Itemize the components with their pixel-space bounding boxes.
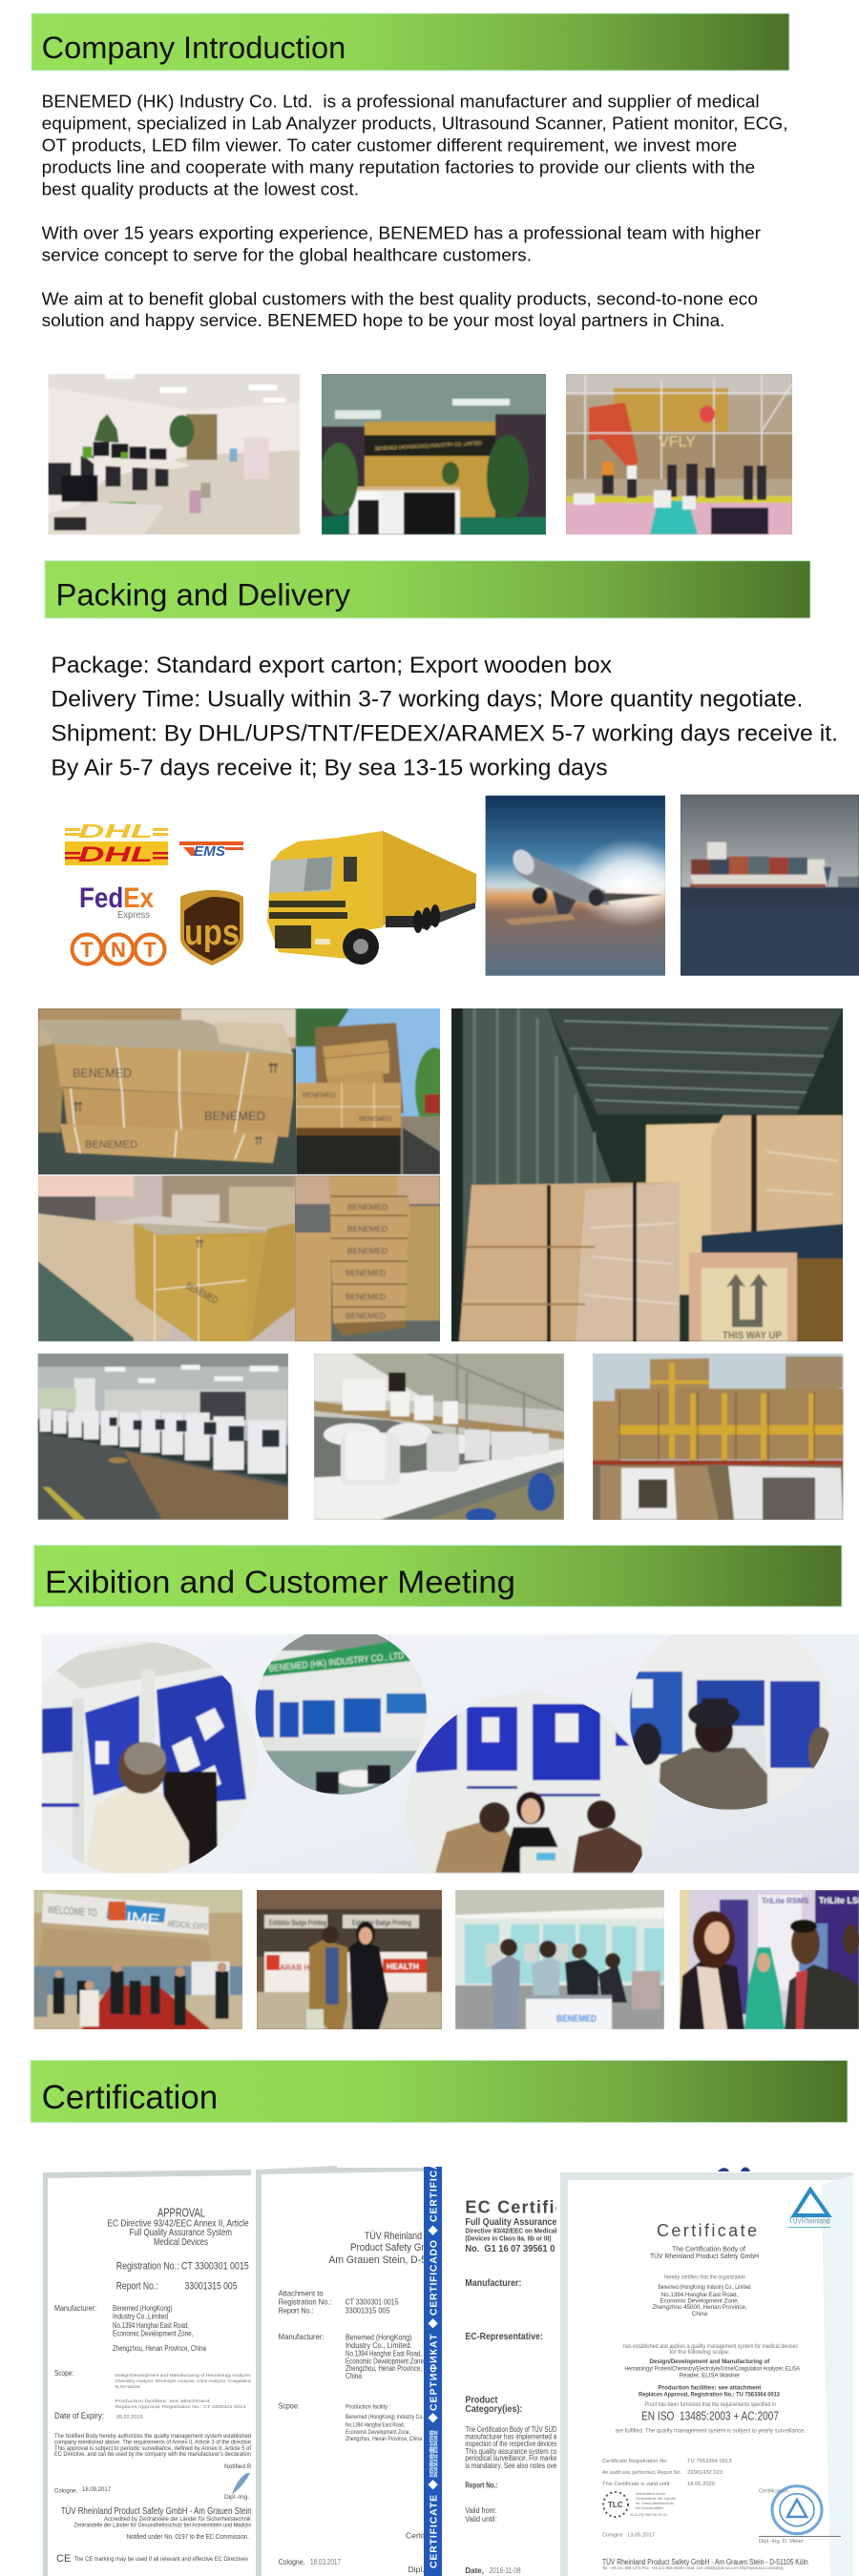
photo: customer and staff at Arab Health: Exhibitor Badge Printing [269,1919,326,1927]
heading: Packing and Delivery: Packing and Delivery [55,577,350,612]
text block: delivery terms: Delivery Time: Usually within 3-7 working days; More quantity negotiate. [51,687,803,713]
certificate seal strip: CERTIFICATE [428,2495,439,2568]
heading: Packing and Delivery [45,561,810,618]
image: yellow truck [267,831,476,965]
certificate: approval: 33001315 005 [185,2280,237,2292]
photo: FIME medical expo entrance: MEDICAL EXPO [167,1919,208,1932]
icon: TUV triangle [788,2190,830,2228]
certificate: EC certificate: Report No.: [465,2481,497,2490]
certificate: approval: The Notified Body hereby authorizes the quality management system established [54,2433,252,2440]
certificate: approval: Zhengzhou, Henan Province, China [113,2344,206,2353]
text block: company introduction: service concept to serve for the global healthcare customers. [42,244,532,264]
icon: accreditation mark [603,2491,677,2517]
certificate: ISO 13485: TÜV Rheinland Product Safety GmbH - Am Grauen Stein - D-51105 Köln [602,2558,808,2566]
photo: FIME medical expo entrance: FIME [114,1908,161,1928]
circular photo: booth with table: BENEMED (HK) INDUSTRY CO., LTD [268,1651,405,1674]
photo: BENEMED cartons stack: ⇈ [254,1134,263,1148]
certificate: approval: ELISA Washer [115,2384,141,2390]
certificate: ISO 13485: TÜV Rheinland Product Safety GmbH [650,2252,759,2260]
photo: FIME medical expo entrance [34,1890,242,2029]
certificate: approval: Notified Body [224,2463,262,2470]
certificate: approval: Cologne, [54,2488,77,2494]
photo: boxed reagent cartons [593,1353,844,1520]
certificate: approval: Chemistry Analyzer, Electrolyte Analyzer, Urine Analyzer, Coagulation [115,2379,252,2384]
certificate: attachment: Attachment to [279,2288,324,2297]
certificate: ISO 13485: An audit was performed, Report No. [602,2470,681,2476]
photo: team at playground [566,374,792,534]
certificate: approval: EC Directive 93/42/EEC Annex II, Article 3 [107,2219,256,2229]
photo: cartons loaded on truck: BENEMED [359,1116,392,1123]
certificate: ISO 13485: Tel. +49 221 806-1371 Fax: +49 221 806-3935 e-mail: cert-validity@de.tuv.com http://www.tuv.com/safety [602,2566,785,2570]
certificate: approval: CE [56,2553,71,2565]
certificate: attachment: Cologne, [279,2557,305,2566]
icon: TNT logo [73,935,164,964]
certificate: ISO 13485: Design/Development and Manufacturing of [649,2358,770,2365]
certificate: ISO 13485: EN ISO 13485:2003 + AC:2007 [641,2409,779,2423]
photo: BENEMED cartons stack [38,1008,296,1174]
certificate: EC certificate: manufacturer has implemented a [465,2433,557,2441]
text block: company introduction: We aim at to benefit global customers with the best quality products, second-to-none eco [42,288,758,308]
photo: stacked cartons on pallet: BENEMED [346,1311,386,1320]
icon: UPS shield: ups [184,913,240,953]
icon: DHL logos: DHL [78,821,153,842]
certificate: attachment: Registration No.: [279,2297,332,2307]
certificate: attachment: Benemed (HongKong) Industry Co.,Limited [346,2415,441,2420]
photo: warehouse carton row: ⇈ [195,1237,204,1251]
photo: container with wooden crates: THIS WAY UP [723,1330,782,1341]
photo: team at playground: VFLY [659,434,696,450]
icon: FedEx logo: FedEx [79,883,154,914]
icon: TNT logo: T [80,938,94,962]
text block: delivery terms: Package: Standard export carton; Export wooden box [51,653,612,678]
text block: company introduction: BENEMED (HK) Industry Co. Ltd. is a professional manufacturer and supplier of medical [42,92,760,112]
certificate: ISO 13485: China [692,2311,708,2317]
text block: company introduction [42,92,788,330]
text block: company introduction: OT products, LED film viewer. To cater customer different requirement, we invest more [42,135,737,155]
certificate: attachment: TÜV Rheinland [365,2231,422,2242]
certificate: ISO 13485: Reader, ELISA Washer [680,2372,740,2379]
circular photo: visitor in hat [629,1634,831,1810]
text block: company introduction: With over 15 years exporting experience, BENEMED has a professional team with higher [42,222,761,242]
certificate: approval: Medical Devices [154,2237,208,2248]
certificate: approval: Production facilities: see attachment [115,2399,210,2404]
text block: delivery terms: Shipment: By DHL/UPS/TNT/FEDEX/ARAMEX 5-7 working days receive it. [51,721,838,747]
certificate: approval: Report No.: [116,2280,158,2292]
photo: staff with visitors [680,1890,859,2029]
certificate: attachment [256,2166,424,2576]
certificate: approval: APPROVAL [157,2206,205,2220]
certificate: approval: Zentralstelle der Länder für Gesundheitsschutz bei Arzneimitteln und Medizin [74,2523,252,2529]
certificate: approval: Manufacturer: [54,2304,96,2313]
heading: Exibition and Customer Meeting: Exibition and Customer Meeting [45,1565,515,1600]
certificate: ISO 13485: Certificate [657,2221,757,2240]
exhibition banner with circular photos [42,1634,859,1874]
certificate: EC certificate: No. G1 16 07 39561 0 [465,2243,555,2254]
photo: reception lobby [322,374,546,534]
photo: office [48,374,300,534]
certificate: approval: 09.02.2019 [116,2415,143,2420]
certificate: ISO 13485: 22001432 023 [687,2470,723,2476]
photo: customer and staff at Arab Health: Exhibitor Badge Printing [352,1919,411,1927]
icon: TNT logo: N [111,938,126,962]
certificate seal strip: ◆ [428,2479,439,2490]
certificate: ISO 13485 [560,2168,853,2576]
certificate: approval: No.1394 Hanghai East Road, [113,2321,189,2330]
icon: FedEx logo: Express [117,909,150,921]
icon: accreditation mark: ZLG-ZQ 990.00.15-01 [630,2512,668,2517]
icon: TNT logo: T [143,938,157,962]
certificate: approval: Benemed (HongKong) [113,2304,173,2313]
photo: white devices on shelves [314,1353,564,1520]
photo: customer and staff at Arab Health: ARAB H [280,1963,309,1972]
certificate: approval: company mentioned above. The requirements of Annex II, Article 3 of the directive [54,2439,252,2446]
certificate: approval: Economic Development Zone, [113,2330,193,2338]
icon: EMS logo: EMS [194,843,225,860]
certificate: EC certificate: This quality assurance system co [465,2447,557,2456]
photo: staff with visitors: TriLite RSMS [762,1897,809,1905]
photo: BENEMED booth meeting [455,1890,664,2029]
certificate: approval [43,2170,251,2576]
certificate: approval: Industry Co.,Limited [113,2313,168,2320]
certificate: ISO 13485: for the following scope: [669,2349,730,2356]
photo: container with wooden crates [451,1008,843,1341]
certificate: EC certificate: (Devices in Class IIa, IIb or III) [465,2234,552,2243]
certificate: attachment: CT 3300301 0015 [346,2297,399,2307]
certificate: EC certificate: The Certification Body of TÜV SÜD [465,2425,557,2434]
certificate seal strip: ◆ [428,2225,439,2235]
photo: stacked cartons on pallet [295,1175,440,1341]
photo: analyzers on production line [38,1353,288,1520]
photo: BENEMED cartons stack: ⇈ [73,1099,84,1114]
certificate: EC certificate: EC-Representative: [465,2331,543,2342]
certificate: approval: Replaces Approval, Registration No.: CT 3300301 0014 [115,2404,246,2410]
certificate: EC certificate: is mandatory. See also notes ove [465,2462,557,2470]
photo: stacked cartons on pallet: BENEMED [347,1246,388,1256]
certificate: ISO 13485: TU 7563364 0013 [687,2459,731,2464]
circular photo: visitors at booth [42,1641,258,1874]
certificate: ISO 13485: has established and applies a quality management system for medical devices [623,2343,798,2350]
photo: stacked cartons on pallet: BENEMED [347,1224,388,1234]
certificate seal strip: CERTIFICATE [428,2149,439,2222]
certificate: attachment: Benemed (HongKong) [346,2332,412,2341]
certificate: EC certificate: Date, [465,2566,484,2575]
certificate: EC certificate: Manufacturer: [465,2277,521,2289]
certificate: ISO 13485: Replaces Approval, Registration No.: TU 7563364 0013 [639,2392,781,2399]
certificate: EC certificate: Valid from: [465,2506,496,2515]
certificate: ISO 13485: hereby certifies that the organization [664,2275,745,2281]
icon: accreditation mark: TLC [608,2501,623,2509]
certificate: ISO 13485: Cologne [602,2532,623,2538]
text block: delivery terms: By Air 5-7 days receive it; By sea 13-15 working days [51,755,608,780]
photo: customer and staff at Arab Health: HEALTH [387,1962,419,1971]
certificate: approval: Dipl.-Ing. Christian [224,2494,276,2501]
photo: reception lobby: BENEMED (HONGKONG) INDUSTRY CO.,LIMITED [375,441,482,452]
heading: Certification: Certification [42,2079,218,2116]
certificate: attachment: Dipl.-Ing. [409,2565,441,2574]
certificate: EC certificate: inspection of the respective devices [465,2440,556,2448]
heading: Company Introduction [31,13,789,71]
certificate: ISO 13485: The Certification Body of [672,2244,746,2254]
certificate: EC certificate: Directive 93/42/EEC on Medical [465,2227,556,2234]
text block: company introduction: equipment, specialized in Lab Analyzer products, Ultrasound Scanner, Patient monitor, ECG, [42,114,788,134]
certificate: approval: Notified under No. 0197 to the EC Commission. [127,2532,249,2541]
certificate: attachment: No.1394 Hanghai East Road, [346,2350,422,2358]
photo: stacked cartons on pallet: BENEMED [347,1202,388,1212]
certificate: ISO 13485: Certificate Registration No. [602,2459,669,2464]
certificate: approval: 18.09.2017 [82,2487,112,2493]
certificate: ISO 13485: 13.05.2017 [627,2532,655,2538]
certificate: ISO 13485: Proof has been furnished that the requirements specified in [645,2401,776,2408]
certificate: approval: EC Directive, and can be used by the company with the manufacturer's declaration [54,2451,251,2458]
icon: EMS logo [179,841,243,860]
certificate: EC certificate: Category(ies): [465,2403,522,2415]
certificate: attachment: Economic Development Zone, [346,2430,410,2436]
circular photo: staff with customers [407,1693,648,1874]
certificate: approval: This approval is subject to periodic surveillance, defined by Annex II, Article 5 of [54,2445,251,2452]
certificate: EC certificate: EC Certificate [465,2198,593,2217]
photo: cartons loaded on truck: BENEMED [303,1092,336,1099]
certificate: attachment: Economic Development Zone [346,2358,424,2366]
photo: stacked cartons on pallet: BENEMED [346,1268,386,1278]
certificate: ISO 13485: are fulfilled. The quality management system is subject to yearly surveillance. [616,2428,806,2435]
certificate: approval: Scope: [54,2369,73,2378]
icon: DHL logos [65,821,168,866]
icon: accreditation mark: Akkreditiert durch [636,2491,665,2496]
photo: warehouse carton row [38,1175,295,1341]
certificate: ISO 13485: Benemed (HongKong) Industry Co., Limited [658,2284,751,2291]
icon: UPS shield [180,890,243,966]
heading: Company Introduction: Company Introduction [42,31,346,65]
certificate: EC certificate: Valid until: [465,2515,496,2524]
certificate: approval: The CE marking may be used if all relevant and effective EC Directives [74,2556,248,2563]
icon: accreditation mark: Zentralstelle der Länder [636,2496,677,2501]
certificate: EC certificate: Product [465,2394,498,2405]
certificate: EC certificate: 2016-11-08 [490,2566,521,2575]
photo: BENEMED cartons stack: BENEMED [204,1109,265,1123]
certificate: approval: Full Quality Assurance System [130,2228,232,2238]
certificate: approval: Design/Development and Manufacturing of Hematology Analyzer, [115,2373,252,2379]
certificate: ISO 13485: Production facilities: see attachment [658,2384,761,2391]
certificate seal strip: CERTIFICADO [428,2240,439,2316]
text block: delivery terms [51,653,838,780]
text block: company introduction: products line and cooperate with many reputation factories to provide our clients with the [42,156,755,177]
certificate: attachment: China [346,2372,363,2380]
certificate: attachment: Scpoe: [279,2401,300,2411]
certificate: ISO 13485: Economic Development Zone, [660,2297,740,2305]
certificate: ISO 13485: 18.05.2020 [687,2482,715,2487]
certificate: attachment: Am Grauen Stein, D-51105 [328,2254,448,2266]
text block: company introduction: best quality products at the lowest cost. [42,178,359,198]
certificate: EC certificate [466,2200,556,2574]
certificate seal strip: 認證證書認證 [428,2430,439,2478]
certificate: EC certificate: Full Quality Assurance [465,2216,557,2228]
certificate: attachment: Product Safety GmbH [350,2242,441,2254]
photo: BENEMED booth meeting: BENEMED [556,2014,597,2025]
certificate: approval: TÜV Rheinland Product Safety GmbH - Am Grauen Stein [61,2505,252,2517]
certificate: attachment: Production facility : [346,2405,390,2411]
certificate: attachment: Zhengzhou, Henan Province, [346,2364,422,2373]
certificate seal strip [424,2149,442,2576]
certificate seal strip: ◆ [428,2412,439,2423]
photo: container ship [681,794,859,976]
certificate seal strip: СЕРТИФИКАТ [428,2334,439,2411]
certificate: ISO 13485: No.1394 Hanghai East Road, [661,2292,739,2298]
certificate: attachment: 18.03.2017 [310,2558,341,2566]
certificate: ISO 13485: Dipl.-Ing. D. Meier [759,2539,804,2545]
certificate: approval: Accredited by Zentralstelle der Länder für Sicherheitstechnik [104,2516,252,2523]
certificate: ISO 13485: Zhengzhou 45000, Henan Province, [652,2304,747,2311]
icon: accreditation mark: für Gesundheitsschutz [636,2501,674,2505]
photo: BENEMED cartons stack: BENEMED [73,1066,132,1080]
photo: stacked cartons on pallet: BENEMED [346,1292,386,1301]
certificate: EC certificate: periodical surveillance. For marke [465,2454,557,2462]
text block: company introduction: solution and happy service. BENEMED hope to be your most loyal partners in China. [42,310,725,330]
icon: TUV triangle: TÜVRheinland [789,2217,830,2226]
circular photo: booth with table [256,1634,428,1795]
certificate: ISO 13485: Hematology/ Protein/Chemistry/Electrolyte/Urine/Coagulation Analyzer, ELISA [624,2366,801,2373]
icon: DHL logos: DHL [78,842,153,866]
certificate: attachment: Certification [406,2530,449,2540]
certificate: approval: Date of Expiry: [54,2411,104,2420]
icon: blue certification seal [772,2486,822,2534]
certificate: attachment: Manufacturer: [279,2332,325,2341]
certificate: approval: Registration No.: CT 3300301 0015 [116,2260,249,2272]
certificate: ISO 13485: This Certificate is valid until: [602,2482,671,2487]
photo: warehouse carton row: BENEMED [184,1280,220,1307]
photo: BENEMED cartons stack: BENEMED [85,1139,137,1151]
certificate: attachment: 33001315 005 [346,2306,390,2316]
photo: cartons loaded on truck [296,1008,440,1174]
photo: FIME medical expo entrance: WELCOME TO [47,1904,97,1920]
heading: Exibition and Customer Meeting [34,1546,842,1607]
certificate: attachment: Industry Co., Limited. [346,2340,412,2350]
photo: BENEMED cartons stack: ⇈ [267,1061,280,1077]
icon: accreditation mark: bei Arzneimitteln [636,2505,663,2510]
certificate seal strip: ◆ [428,2318,439,2328]
heading: Certification [31,2061,848,2123]
photo: customer and staff at Arab Health [257,1890,442,2029]
certificate: attachment: Report No.: [279,2306,314,2316]
photo: airplane at sunset [485,796,665,976]
certificate: attachment: Zhengzhou, Henan Province, China [346,2437,423,2442]
certificate: attachment: No.1394 Hanghai East Road, [346,2423,405,2429]
certificate: ISO 13485: Certification [759,2488,788,2494]
